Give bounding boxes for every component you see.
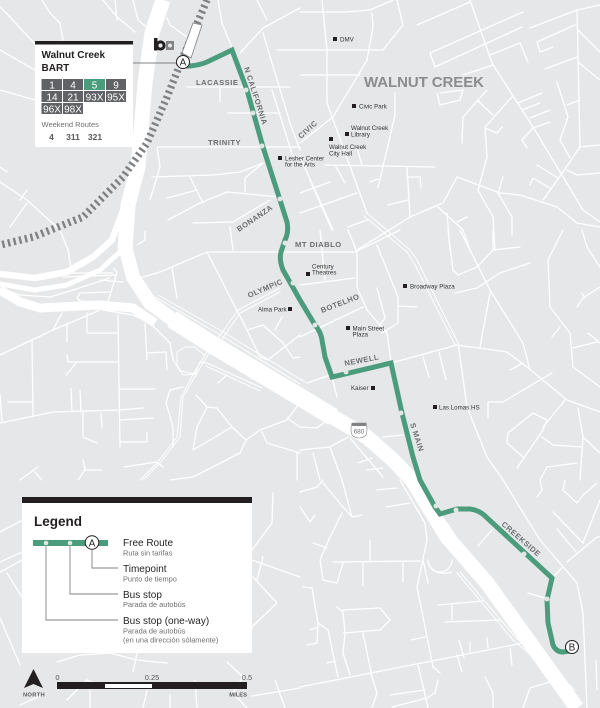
place markers and labels: Walnut Creek: [351, 125, 389, 132]
street labels: CIVIC: [296, 119, 319, 140]
street labels: TRINITY: [208, 138, 241, 147]
street labels: N CALIFORNIA: [242, 66, 269, 126]
icon: north arrow: NORTH: [23, 692, 45, 698]
timepoint A: [176, 56, 190, 69]
route number grid: 96X: [43, 104, 61, 116]
place markers and labels: Lesher Center: [285, 156, 324, 162]
interstate 680 shield: 680: [354, 428, 365, 436]
route number grid: 4: [70, 80, 76, 92]
legend: bus stop: Bus stop: [123, 590, 162, 601]
legend: timepoint: Timepoint: [123, 564, 167, 575]
legend: free route: Free Route: [123, 538, 173, 549]
heading: station name: BART: [42, 63, 69, 74]
legend route sample: A: [89, 538, 96, 549]
route number grid: 21: [67, 92, 79, 104]
weekend routes: Weekend Routes: [42, 120, 99, 129]
icon: north arrow: [23, 669, 45, 698]
heading: Legend: Legend: [34, 514, 82, 529]
street labels: OLYMPIC: [246, 277, 284, 300]
legend: free route: [123, 538, 173, 558]
street labels: BOTELHO: [319, 292, 361, 315]
legend: timepoint: Punto de tiempo: [123, 574, 177, 584]
place markers and labels: City Hall: [329, 150, 352, 158]
scale bar: [55, 673, 252, 698]
place markers and labels: [258, 36, 480, 412]
timepoint B: B: [569, 643, 576, 654]
place markers and labels: Las Lomas HS: [439, 404, 480, 412]
connector: station to timepoint A: [133, 62, 177, 64]
street labels: BONANZA: [235, 203, 275, 234]
weekend routes: 4: [49, 132, 54, 142]
place markers and labels: Civic Park: [359, 104, 388, 110]
place markers and labels: Theatres: [312, 270, 336, 276]
street labels: NEWELL: [344, 352, 380, 368]
bus stops: [244, 88, 550, 602]
weekend routes: [42, 120, 102, 142]
street labels: [196, 66, 542, 559]
place markers and labels: Library: [351, 132, 371, 138]
route number grid: 5: [92, 80, 98, 92]
street labels: S MAIN: [408, 422, 426, 453]
place markers and labels: Alma Park: [258, 306, 287, 314]
route number grid: 98X: [64, 104, 82, 116]
route number grid: [42, 79, 126, 116]
route number grid: 9: [113, 80, 119, 92]
weekend routes: 311: [66, 132, 80, 142]
panel: Walnut Creek BART: [35, 41, 133, 147]
timepoint B: [566, 640, 578, 654]
route number grid: 1: [49, 80, 55, 92]
legend: free route: Ruta sin tarifas: [123, 548, 173, 558]
place markers and labels: Kaiser: [351, 385, 369, 392]
route number grid: 93X: [86, 92, 104, 104]
legend route sample: [33, 536, 118, 620]
scale bar: 0: [55, 673, 60, 682]
legend: bus stop one-way: Parada de autobús: [123, 626, 186, 636]
route number grid: 14: [46, 92, 58, 104]
double roads: [140, 213, 575, 693]
street labels: LACASSIE: [196, 78, 238, 87]
panel: legend: [22, 497, 252, 653]
place markers and labels: Walnut Creek: [329, 144, 367, 151]
place markers and labels: DMV: [340, 36, 355, 44]
scale bar: 0.25: [145, 673, 159, 682]
legend: bus stop: Parada de autobús: [123, 600, 186, 609]
icon: BART logo: [154, 38, 174, 50]
legend: bus stop one-way: Bus stop (one-way): [123, 616, 209, 627]
scale bar: 0.5: [242, 673, 252, 682]
place markers and labels: Century: [312, 264, 335, 270]
place markers and labels: Plaza: [352, 332, 369, 338]
route number grid: 95X: [107, 92, 125, 104]
weekend routes: 321: [88, 132, 102, 142]
street labels: MT DIABLO: [295, 240, 342, 249]
legend: bus stop: [123, 590, 186, 609]
interstate 680 shield: [351, 423, 367, 438]
legend: bus stop one-way: [123, 616, 218, 644]
BART station platform: [182, 23, 202, 58]
place markers and labels: Main Street: [352, 326, 384, 332]
city label: WALNUT CREEK: [364, 74, 484, 91]
heading: station name: Walnut Creek: [42, 50, 105, 61]
timepoint A: A: [180, 58, 187, 69]
street labels: CREEKSIDE: [500, 520, 542, 559]
route line: [183, 50, 570, 652]
place markers and labels: Broadway Plaza: [410, 284, 455, 290]
legend: timepoint: [123, 564, 177, 584]
place markers and labels: for the Arts: [285, 162, 315, 168]
BART rail line: [0, 0, 207, 245]
legend: bus stop one-way: (en una dirección sólamente): [123, 636, 218, 644]
scale bar: MILES: [229, 692, 247, 698]
